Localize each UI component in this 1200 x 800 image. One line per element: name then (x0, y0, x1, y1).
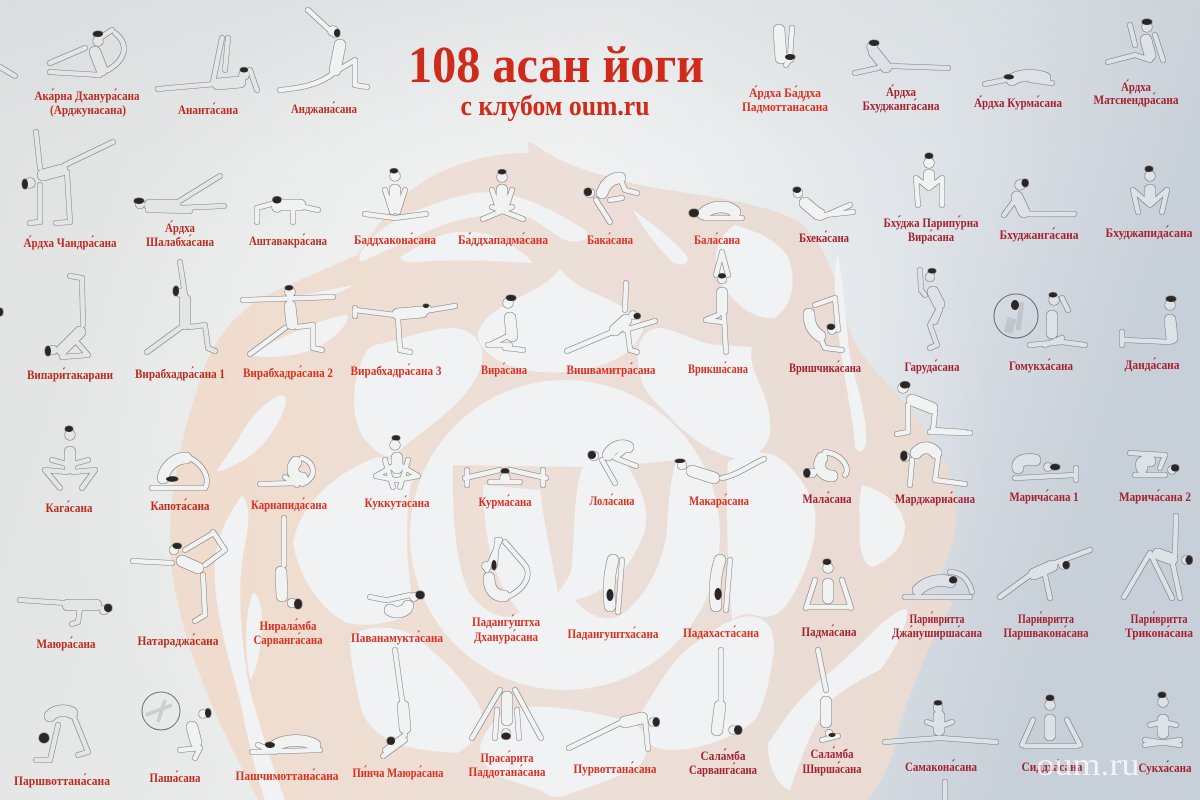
asana: Аштавакрасана: Аштавакра́сана (249, 233, 327, 248)
subtitle: с клубом oum.ru (460, 90, 650, 122)
asana: Падангуштхасана (568, 560, 659, 641)
asana: Врикшасана (688, 252, 748, 376)
asana: Кагасана (45, 426, 95, 515)
asana: Акарна Дханурасана: (Арджунасана) (50, 102, 126, 117)
asana: Маричасана 2: Марича́сана 2 (1119, 489, 1191, 504)
asana: Ардха Матсиендрасана: Матсиендра́сана (1094, 92, 1179, 107)
figure (1108, 19, 1163, 62)
asana: Дандасана: Данда́сана (1124, 357, 1180, 372)
asana: Вирабхадрасана 2 (243, 286, 333, 380)
asana: Пинча Маюрасана: Пи́нча Маюра́сана (352, 765, 444, 780)
asana: Самаконасана (885, 700, 996, 774)
asana: Баддхаконасана: Баддхакона́сана (354, 232, 436, 247)
figure (1030, 292, 1085, 345)
asana: Паванамуктасана: Паванамукта́сана (351, 630, 443, 645)
asana: Бакасана: Бака́сана (587, 232, 633, 247)
asana: Вирабхадрасана 1 (135, 262, 225, 381)
asana: Паривритта Паршваконасана: Пари́вритта (1018, 611, 1074, 626)
asana: Акарна Дханурасана (34, 30, 140, 117)
asana: Маласана: Мала́сана (802, 491, 852, 506)
asana: Гомукхасана with inset: Гомукха́сана (1009, 358, 1073, 373)
figure (706, 252, 728, 352)
asana: Гарудасана: Гаруда́сана (904, 359, 960, 374)
asana: Бхуджапидасана (1106, 166, 1193, 240)
asana: Гомукхасана with inset (994, 292, 1085, 373)
asana: Маласана (802, 452, 852, 506)
asana: Врикшасана: Врикша́сана (688, 361, 748, 376)
figure (1130, 453, 1179, 475)
asana: Прасарита Падотанасана: Праса́рита (480, 750, 534, 765)
figure (689, 207, 742, 218)
figure (1133, 166, 1167, 212)
figure (472, 690, 541, 740)
asana: Паривритта Джанусиршасана: Пари́вритта (910, 611, 965, 626)
figure (133, 532, 225, 621)
asana: Вишвамитрасана: Вишвамитра́сана (566, 362, 656, 377)
figure (243, 286, 333, 354)
figure (809, 298, 842, 350)
figure (567, 283, 655, 352)
asana: Гарудасана (904, 268, 960, 374)
asana: Саламба Сарвангасана: Сала́мба (700, 748, 746, 763)
figure (370, 591, 424, 612)
figure: Акарна (50, 30, 124, 75)
asana: Ардха Бхуджангасана: Бхуджанга́сана (862, 98, 940, 113)
asana: Анантасана: Ананта́сана (178, 102, 238, 117)
asana: Натараджасана (133, 532, 225, 648)
figure (920, 268, 940, 348)
asana: Пурвоттанасана (569, 718, 660, 776)
asana: Падангуштхасана: Падангуштха́сана (568, 626, 659, 641)
figure (22, 132, 113, 223)
asana: Паривритта Паршваконасана (1000, 550, 1090, 640)
figure (355, 304, 455, 352)
asana: Маюрасана: Маюра́сана (36, 636, 96, 651)
asana: Маричасана 1 (1010, 459, 1078, 504)
asana: Маричасана 2 (1119, 453, 1191, 504)
watermark: oum.ru (1036, 746, 1140, 782)
figure (588, 446, 636, 483)
asana: Паршвоттанасана (14, 711, 110, 788)
asana: Ардха Баддха Падмоттанасана: А́рдха Ба́ддха (749, 85, 821, 100)
asana: Бхекасана (793, 187, 853, 245)
asana: Марджариасана (895, 382, 975, 506)
asana: Бхуджапидасана: Бхуджапида́сана (1106, 225, 1193, 240)
figure (806, 559, 851, 608)
asana: Ардха Шалабхасана: А́рдха (165, 220, 195, 235)
asana: Ниралaмба Сарвангасана (254, 518, 323, 647)
figure (1022, 695, 1080, 746)
asana: Макарасана (675, 459, 764, 508)
asana: Саламба Ширшасана: Ширша́сана (802, 761, 862, 776)
asana: Баддхападмасана (458, 170, 548, 247)
asana: Ардха Шалабхасана (134, 176, 224, 249)
figure (885, 700, 996, 742)
asana: Курмасана: Курма́сана (478, 494, 532, 509)
asana: Вирасана: Вира́сана (481, 362, 527, 377)
mandala background (170, 143, 956, 800)
asana: Ардха Курмасана: А́рдха Курма́сана (974, 95, 1062, 110)
figure (147, 262, 215, 352)
asana: Саламба Ширшасана (802, 650, 862, 776)
asana: Падмасана (802, 559, 857, 639)
asana: Вирабхадрасана 3: Вирабхадра́сана 3 (350, 363, 442, 378)
asana: Куккутасана (364, 436, 430, 510)
asana: Баддхаконасана (354, 168, 436, 247)
asana: Анджанасана: Анджана́сана (291, 101, 357, 116)
figure (488, 295, 523, 350)
figure: Анджана (280, 10, 367, 90)
figure (45, 426, 95, 488)
asana: Саламба Сарвангасана: Сарванга́сана (689, 762, 757, 777)
asana: Вришчикасана (789, 298, 861, 375)
asana: Маюрасана (20, 600, 112, 651)
figure (779, 28, 795, 65)
asana: Паривритта Паршваконасана: Паршвакона́сана (1004, 625, 1089, 640)
figure (134, 176, 224, 211)
figure (1000, 550, 1090, 598)
asana: Карнапидасана: Карнапида́сана (251, 497, 327, 512)
asana: Вирабхадрасана 2: Вирабхадра́сана 2 (243, 365, 333, 380)
figure (584, 178, 637, 222)
asana: Прасарита Падотанасана (468, 690, 546, 779)
asana: Випаритакарани (27, 276, 113, 382)
asana: Ардха Баддха Падмоттанасана: Падмоттана́сана (742, 99, 828, 114)
asana: Саламба Сарвангасана (689, 650, 757, 777)
asana: Вирасана (481, 295, 527, 377)
asana: Бхуджангасана: Бхуджанга́сана (1000, 227, 1079, 242)
asana: Паванамуктасана (351, 591, 443, 645)
figure (483, 170, 523, 219)
asana: Ардха Чандрасана (22, 132, 117, 250)
asana: Паривритта Триконасана: Трикона́сана (1125, 625, 1193, 640)
asana: Саламба Ширшасана: Сала́мба (810, 746, 854, 761)
asana: Паривритта Джанусиршасана: Джа́нуширша́сана (892, 625, 982, 640)
figure: Ананта (158, 38, 257, 90)
asana: Ниралaмба Сарвангасана: Нирала́мба (260, 618, 317, 633)
asana: Капотасана (150, 457, 210, 513)
asana: Паривритта Триконасана (1124, 516, 1193, 640)
asana: Самаконасана: Самакона́сана (905, 759, 977, 774)
asana: Ардха Чандрасана: А́рдха Чандра́сана (24, 235, 117, 250)
title: 108 асан йоги (408, 37, 704, 94)
asana: Кагасана: Кага́сана (46, 500, 93, 515)
figure (1015, 459, 1076, 480)
asana: Акарна Дханурасана: Ака́рна Дханура́сана (34, 88, 140, 103)
asana: Бхекасана: Бхека́сана (799, 230, 849, 245)
asana: Натараджасана: Натараджа́сана (138, 633, 219, 648)
figure (465, 468, 546, 485)
figure (905, 572, 972, 597)
asana: Паривритта Джанусиршасана (892, 572, 982, 640)
asana: Лоласана (588, 446, 636, 508)
asana: Баласана (689, 207, 742, 247)
asana: Ардха Бхуджангасана: А́рдха (886, 84, 916, 99)
W stroke decorative centre (453, 460, 677, 618)
asana: Ардха Матсиендрасана (1094, 19, 1179, 107)
asana: Ардха Матсиендрасана: А́рдха (1121, 79, 1151, 94)
asana: Ардха Баддха Падмоттанасана (742, 28, 828, 114)
asana: Бхуджа Парипурна Вирасана: Вира́сана (908, 229, 954, 244)
asana: Сиддхасана (1022, 695, 1083, 774)
asana: Пашасана with inset: Паша́сана (150, 770, 201, 785)
asana: Маричасана 1: Марича́сана 1 (1010, 489, 1078, 504)
asana: Пурвоттанасана: Пурвоттана́сана (574, 761, 657, 776)
figure (855, 40, 948, 73)
figure (793, 187, 853, 218)
figure (482, 540, 528, 598)
title (408, 37, 704, 122)
asana: Пашасана with inset (142, 692, 211, 785)
fragment: figure cut by the lower edge (943, 782, 947, 800)
asana: Баддхападмасана: Ба́ддхападма́сана (458, 232, 548, 247)
figure (152, 457, 207, 488)
asana: Сукхасана (1138, 692, 1192, 775)
figure (252, 740, 320, 752)
asana: Прасарита Падотанасана: Паддотана́сана (468, 764, 546, 779)
asana: Макарасана: Макара́сана (689, 493, 749, 508)
asana: Пашчимоттанасана (236, 740, 339, 783)
asana: Баласана: Бала́сана (694, 232, 740, 247)
figure (365, 168, 426, 218)
asana: Падмасана: Падма́сана (802, 624, 857, 639)
inset circle (142, 692, 180, 730)
asana: Ниралaмба Сарвангасана: Сарванга́сана (254, 632, 323, 647)
figure (1122, 296, 1176, 345)
asana: Паршвоттанасана: Паршвоттана́сана (14, 773, 110, 788)
figure (714, 560, 730, 610)
asana: Сукхасана: Сукха́сана (1138, 760, 1192, 775)
asana: Ардха Шалабхасана: Шалабха́сана (146, 234, 214, 249)
asana: Карнапидасана (251, 458, 327, 512)
figure (675, 459, 764, 478)
asana: Падахастасана: Падахаста́сана (683, 625, 759, 640)
asana: Падангуштха Дханурасана (472, 540, 540, 644)
asana: Падангуштха Дханурасана: Падангу́штха (472, 614, 540, 629)
figure (281, 518, 302, 609)
figures: cow and cat (897, 382, 970, 485)
fragments: figures cut by the left edge (0, 67, 15, 316)
figure (180, 708, 211, 758)
inset circle (994, 294, 1038, 338)
asana: Вришчикасана: Вришчика́сана (789, 360, 861, 375)
asana: Курмасана (465, 468, 546, 509)
asana: Бхуджа Парипурна Вирасана (884, 153, 979, 244)
figure (916, 153, 942, 205)
figure (45, 276, 88, 357)
asana: Бакасана (584, 178, 637, 247)
figure (985, 74, 1052, 84)
asana: Бхуджа Парипурна Вирасана: Бху́джа Парипу́рна (884, 215, 979, 230)
asana: Марджариасана: Марджариа́сана (895, 491, 975, 506)
asana: Куккутасана: Куккута́сана (364, 495, 430, 510)
figure (1124, 516, 1192, 598)
figure (257, 196, 318, 222)
figure (20, 600, 112, 624)
asana: Вишвамитрасана (566, 283, 656, 377)
figure (1145, 692, 1180, 745)
figure (818, 650, 838, 740)
asana: Лоласана: Лола́сана (590, 493, 635, 508)
figure (376, 436, 418, 487)
asana: Падангуштха Дханурасана: Дханура́сана (474, 629, 538, 644)
figure (1004, 179, 1074, 215)
figure (804, 452, 847, 478)
asana: Сиддхасана: Сиддха́сана (1022, 759, 1083, 774)
asana: Анантасана (158, 38, 257, 117)
asana: Анджанасана (280, 10, 367, 116)
figure (606, 560, 622, 612)
asana: Дандасана (1122, 296, 1180, 372)
asana: Ардха Курмасана (974, 74, 1062, 110)
asana: Капотасана: Капота́сана (150, 498, 210, 513)
figure (717, 650, 742, 734)
figure (383, 650, 405, 756)
asana: Пинча Маюрасана (352, 650, 444, 780)
asana: Вирабхадрасана 1: Вирабхадра́сана 1 (135, 366, 225, 381)
asana: Вирабхадрасана 3 (350, 304, 455, 378)
figure (36, 711, 88, 760)
asana: Ардха Бхуджангасана (855, 40, 948, 113)
asana: Випаритакарани: Випари́такарани (27, 367, 113, 382)
figure (569, 718, 660, 749)
asana: Бхуджангасана (1000, 179, 1079, 242)
asana: Аштавакрасана (249, 196, 327, 248)
asana: Пашчимоттанасана: Пашчимоттана́сана (236, 768, 339, 783)
asana: Падахастасана (683, 560, 759, 640)
figure (260, 458, 313, 485)
